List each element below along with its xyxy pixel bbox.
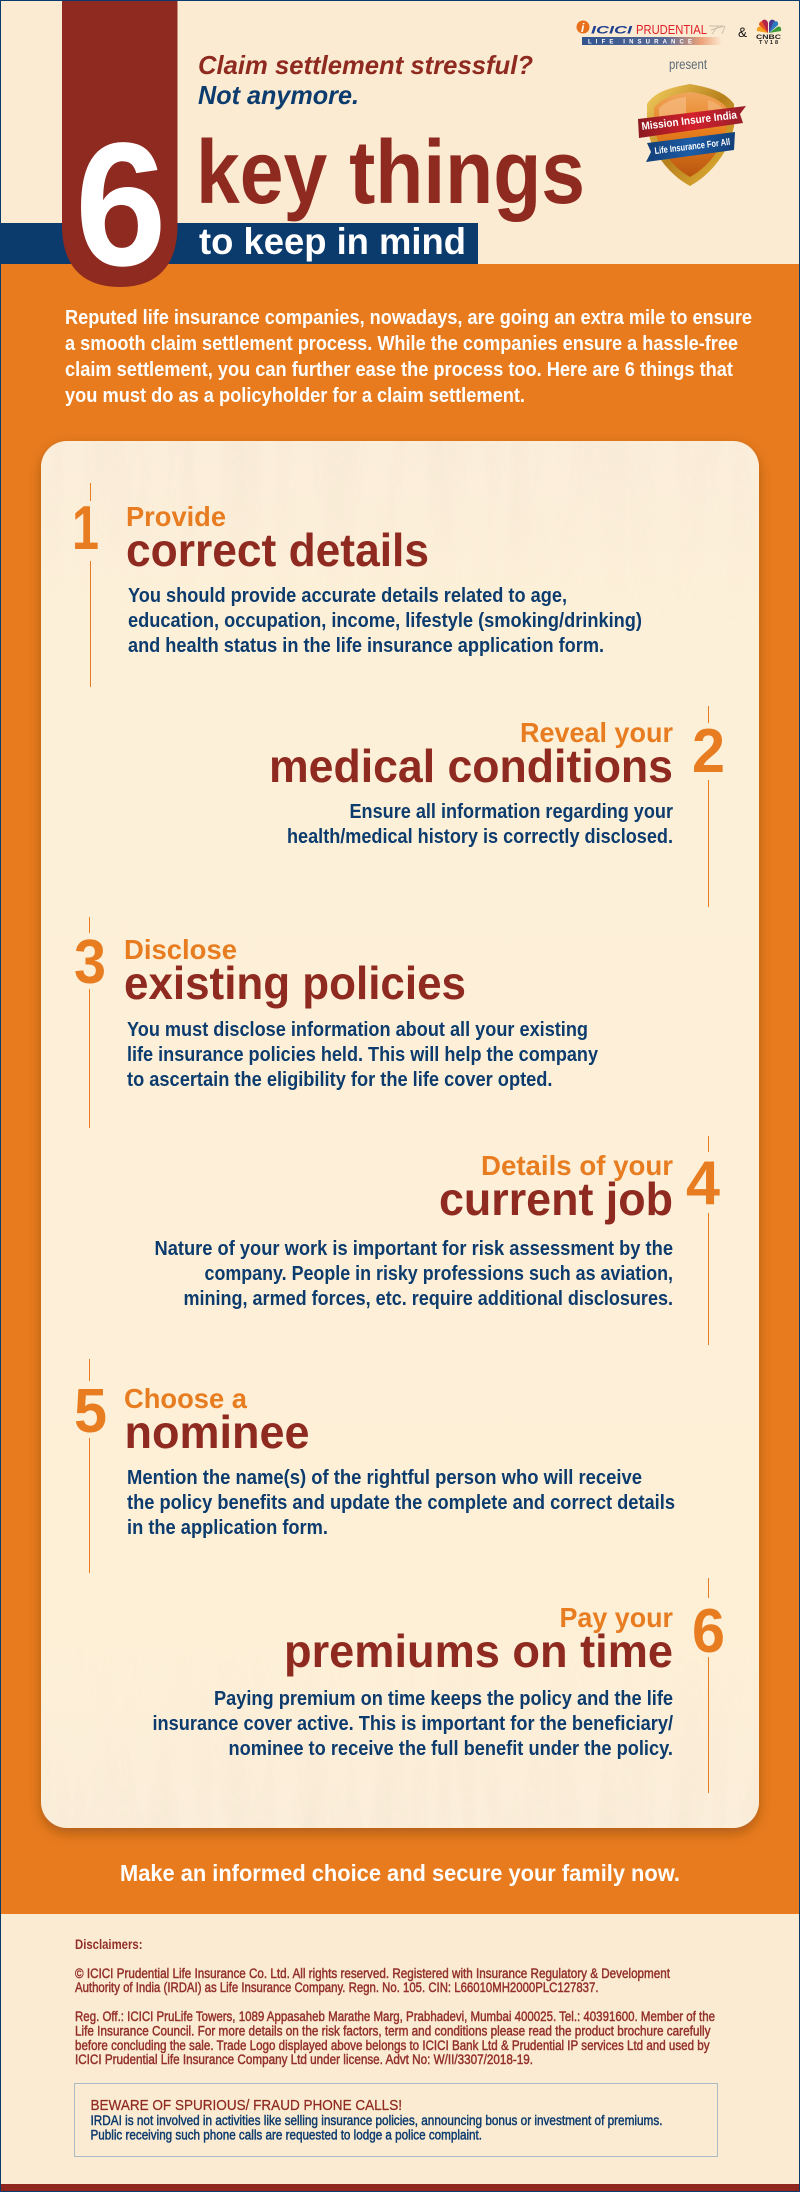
item 2: reveal your medical conditions [269, 706, 725, 907]
logo: CNBC TV18 [756, 20, 781, 46]
badge: Mission Insure India shield: Mission Insure India [641, 109, 738, 133]
heading: Provide [126, 501, 226, 532]
heading: Choose a [124, 1383, 247, 1414]
copyright text [75, 1966, 670, 1995]
present label: present [669, 56, 707, 72]
logo: ICICI Prudential Life Insurance: ICICI [591, 24, 634, 36]
intro paragraph: a smooth claim settlement process. While the companies ensure a hassle-free [65, 333, 738, 355]
body text: You should provide accurate details related to age, [128, 585, 567, 607]
number 5: 5 [74, 1377, 107, 1446]
item 4: details of your current job: current job [439, 1173, 673, 1225]
body text: Nature of your work is important for risk assessment by the [154, 1238, 673, 1260]
footer background [0, 1914, 800, 2184]
copyright text: Authority of India (IRDAI) as Life Insurance Company. Regn. No. 105. CIN: L66010MH2000PLC127837. [75, 1980, 598, 1995]
item 1: provide correct details: correct details [126, 524, 429, 576]
logo: ICICI Prudential Life Insurance: LIFE INSURANCE [588, 40, 692, 46]
fraud warning box [74, 2084, 718, 2156]
item 6: pay your premiums on time: insurance cover active. This is important for the beneficiary/ [152, 1713, 673, 1735]
number 3: 3 [74, 928, 106, 997]
item 3: disclose existing policies [74, 917, 599, 1128]
call to action: Make an informed choice and secure your family now. [120, 1860, 680, 1886]
body text: Ensure all information regarding your [350, 801, 673, 823]
item 5: choose a nominee: the policy benefits and update the complete and correct details [127, 1492, 675, 1514]
badge: Mission Insure India shield [638, 84, 746, 186]
intro paragraph: Reputed life insurance companies, nowadays, are going an extra mile to ensure [65, 307, 752, 329]
item 2: reveal your medical conditions: medical conditions [269, 740, 673, 792]
item 6: pay your premiums on time [152, 1578, 725, 1793]
fraud warning box: Public receiving such phone calls are requested to lodge a police complaint. [90, 2128, 482, 2142]
badge: Mission Insure India shield: Life Insurance For All [654, 137, 731, 157]
item 3: disclose existing policies: existing policies [124, 957, 466, 1009]
item 2: reveal your medical conditions: health/medical history is correctly disclosed. [287, 826, 673, 848]
heading: Pay your [560, 1602, 673, 1633]
item 1: provide correct details: education, occupation, income, lifestyle (smoking/drinking) [128, 610, 642, 632]
intro paragraph [65, 307, 752, 407]
item 5: choose a nominee: in the application form. [127, 1517, 328, 1539]
line: claim settlement: Claim settlement stressful? [198, 50, 533, 80]
item 5: choose a nominee: nominee [124, 1406, 310, 1458]
intro paragraph: claim settlement, you can further ease the process too. Here are 6 things that [65, 359, 733, 381]
ampersand: & [738, 24, 748, 40]
title: key things: key things [196, 123, 585, 223]
blue banner [0, 223, 478, 264]
item 4: details of your current job: mining, armed forces, etc. require additional disclosures. [184, 1288, 673, 1310]
header background [0, 0, 800, 264]
logo: ICICI Prudential Life Insurance: i [581, 21, 585, 35]
warning heading: BEWARE OF SPURIOUS/ FRAUD PHONE CALLS! [90, 2097, 402, 2114]
heading: Details of your [481, 1150, 673, 1181]
item 1: provide correct details: and health status in the life insurance application form. [128, 635, 604, 657]
title: to keep in mind: to keep in mind [199, 221, 466, 262]
item 3: disclose existing policies: life insurance policies held. This will help the company [127, 1044, 599, 1066]
item 6: pay your premiums on time: premiums on time [284, 1625, 673, 1677]
copyright text: © ICICI Prudential Life Insurance Co. Ltd. All rights reserved. Registered with Insurance Regulatory & Development [75, 1966, 670, 1981]
logo: CNBC TV18: TV18 [759, 40, 778, 46]
item 3: disclose existing policies: to ascertain the eligibility for the life cover opted. [127, 1069, 552, 1091]
heading: Disclose [124, 934, 237, 965]
registered office text: before concluding the sale. Trade Logo displayed above belongs to ICICI Bank Ltd & Prudential IP services Ltd and used by [75, 2038, 710, 2053]
disclaimers heading: Disclaimers: [75, 1937, 142, 1952]
disclaimers [75, 1937, 715, 2067]
panel: six key things [41, 441, 759, 1828]
logo: ICICI Prudential Life Insurance [576, 20, 725, 46]
footer bar [0, 2184, 800, 2192]
intro paragraph: you must do as a policyholder for a claim settlement. [65, 385, 525, 407]
registered office text: Life Insurance Council. For more details on the risk factors, term and conditions please read the product brochure carefully [75, 2024, 711, 2038]
number 4: 4 [686, 1149, 721, 1218]
red ribbon [638, 106, 746, 138]
body text: Mention the name(s) of the rightful person who will receive [127, 1467, 642, 1489]
item 5: choose a nominee [74, 1359, 675, 1573]
registered office text: ICICI Prudential Life Insurance Company Ltd under license. Advt No: W/II/3307/2018-19. [75, 2052, 533, 2067]
blue ribbon [646, 132, 735, 162]
number 2: 2 [692, 717, 725, 786]
logo: ICICI Prudential Life Insurance: PRUDENTIAL [636, 22, 707, 37]
item 4: details of your current job: company. People in risky professions such as aviation, [204, 1263, 673, 1285]
warning text: IRDAI is not involved in activities like selling insurance policies, announcing bonus or investment of premiums. [90, 2113, 662, 2128]
orange main section [0, 264, 800, 1914]
red ribbon [62, 0, 178, 287]
line: not anymore: Not anymore. [198, 80, 359, 110]
body text: You must disclose information about all your existing [127, 1019, 588, 1041]
registered office text [75, 2009, 715, 2067]
subtitle question [198, 50, 533, 110]
number 1: 1 [72, 494, 99, 563]
body text: Paying premium on time keeps the policy and the life [214, 1688, 673, 1710]
item 6: pay your premiums on time: nominee to receive the full benefit under the policy. [228, 1738, 673, 1760]
logo: CNBC TV18: CNBC [756, 34, 781, 41]
heading: Reveal your [520, 717, 673, 748]
item 4: details of your current job [154, 1136, 721, 1345]
big number 6: 6 [75, 107, 166, 303]
number 6: 6 [692, 1597, 725, 1666]
item 1: provide correct details [72, 483, 642, 687]
